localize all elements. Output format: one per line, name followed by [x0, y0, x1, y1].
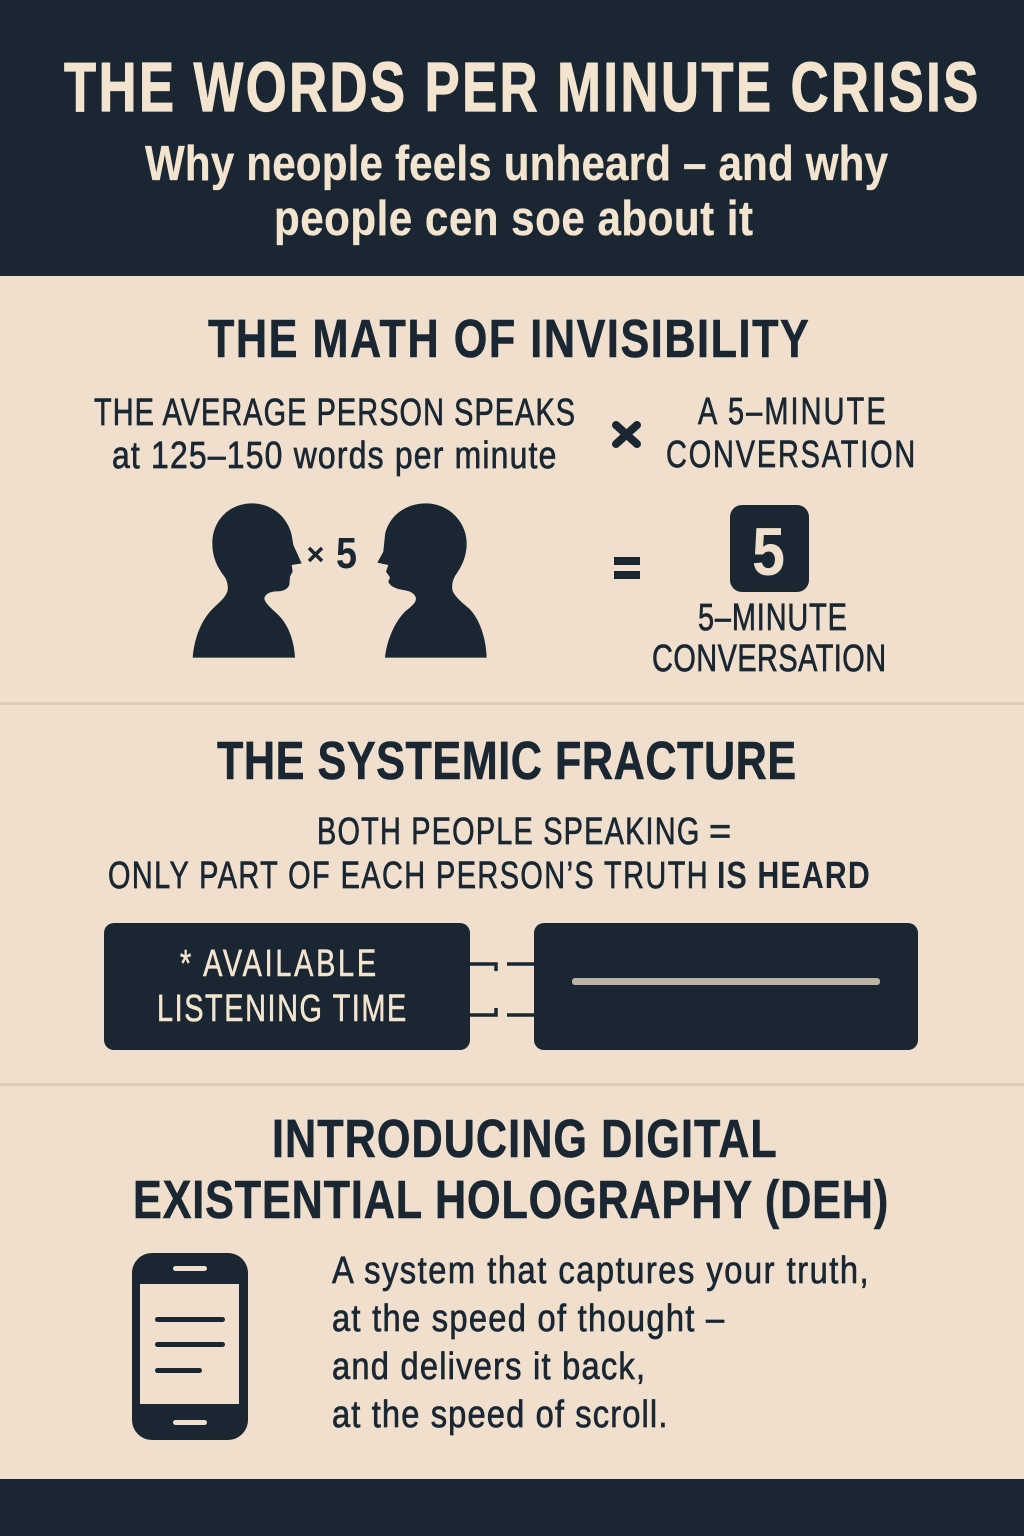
small multiply five label: 5: [336, 529, 357, 578]
box: available listening time: * AVAILABLE: [180, 942, 376, 985]
text: both people speaking: =: [709, 811, 731, 853]
text: a 5-minute conversation: [666, 390, 915, 476]
subtitle: Why neople feels unheard – and why: [145, 136, 889, 191]
text: system description: at the speed of thought –: [332, 1297, 724, 1340]
text: system description: [332, 1249, 869, 1436]
box: fractured bar: [534, 923, 918, 1050]
text: both people speaking: ONLY PART OF EACH PERSON’S TRUTH: [108, 854, 708, 897]
text: 5-minute conversation result: [652, 596, 886, 680]
text: average person speaks: at 125–150 words per minute: [112, 434, 556, 477]
heading: math of invisibility: THE MATH OF INVISIBILITY: [208, 310, 809, 369]
text: system description: A system that captures your truth,: [332, 1249, 869, 1292]
subtitle: [145, 136, 889, 246]
heading: introducing digital existential holography: INTRODUCING DIGITAL: [272, 1110, 777, 1169]
text: 5-minute conversation result: CONVERSATION: [652, 637, 886, 680]
panel: introducing DEH: [132, 1110, 888, 1440]
small multiply five label: [309, 529, 357, 578]
heading: introducing digital existential holography: EXISTENTIAL HOLOGRAPHY (DEH): [133, 1171, 888, 1230]
connector: broken links between boxes: [470, 964, 534, 1015]
text: system description: at the speed of scroll.: [332, 1393, 667, 1436]
text: a 5-minute conversation: CONVERSATION: [666, 433, 915, 476]
icon: left head silhouette: [193, 503, 302, 658]
icon: right head silhouette: [377, 503, 487, 658]
icon: five tile: 5: [752, 514, 785, 590]
text: system description: and delivers it back,: [332, 1345, 645, 1388]
box: available listening time: LISTENING TIME: [157, 987, 406, 1030]
icon: smartphone: [132, 1253, 248, 1440]
heading: systemic fracture: THE SYSTEMIC FRACTURE: [217, 732, 796, 791]
subtitle: people cen soe about it: [274, 191, 753, 246]
text: 5-minute conversation result: 5–MINUTE: [698, 596, 847, 639]
icon: multiply: [616, 425, 637, 444]
text: average person speaks: [94, 391, 575, 477]
panel: the math of invisibility: [94, 310, 915, 680]
title: THE WORDS PER MINUTE CRISIS: [64, 49, 978, 127]
text: a 5-minute conversation: A 5–MINUTE: [698, 390, 886, 433]
panel: the systemic fracture: [104, 732, 918, 1050]
icon: five tile: [730, 505, 809, 592]
heading: introducing digital existential holography: [133, 1110, 888, 1230]
text: average person speaks: THE AVERAGE PERSON SPEAKS: [94, 391, 575, 434]
text: both people speaking: BOTH PEOPLE SPEAKING: [317, 810, 699, 853]
icon: two people facing each other: [193, 503, 487, 658]
box: available listening time: [104, 923, 470, 1050]
icon: equals: [614, 557, 640, 579]
footer band: [0, 1479, 1024, 1536]
text: both people speaking: [108, 810, 870, 897]
header band: [0, 0, 1024, 276]
text: both people speaking: IS HEARD: [717, 855, 870, 897]
